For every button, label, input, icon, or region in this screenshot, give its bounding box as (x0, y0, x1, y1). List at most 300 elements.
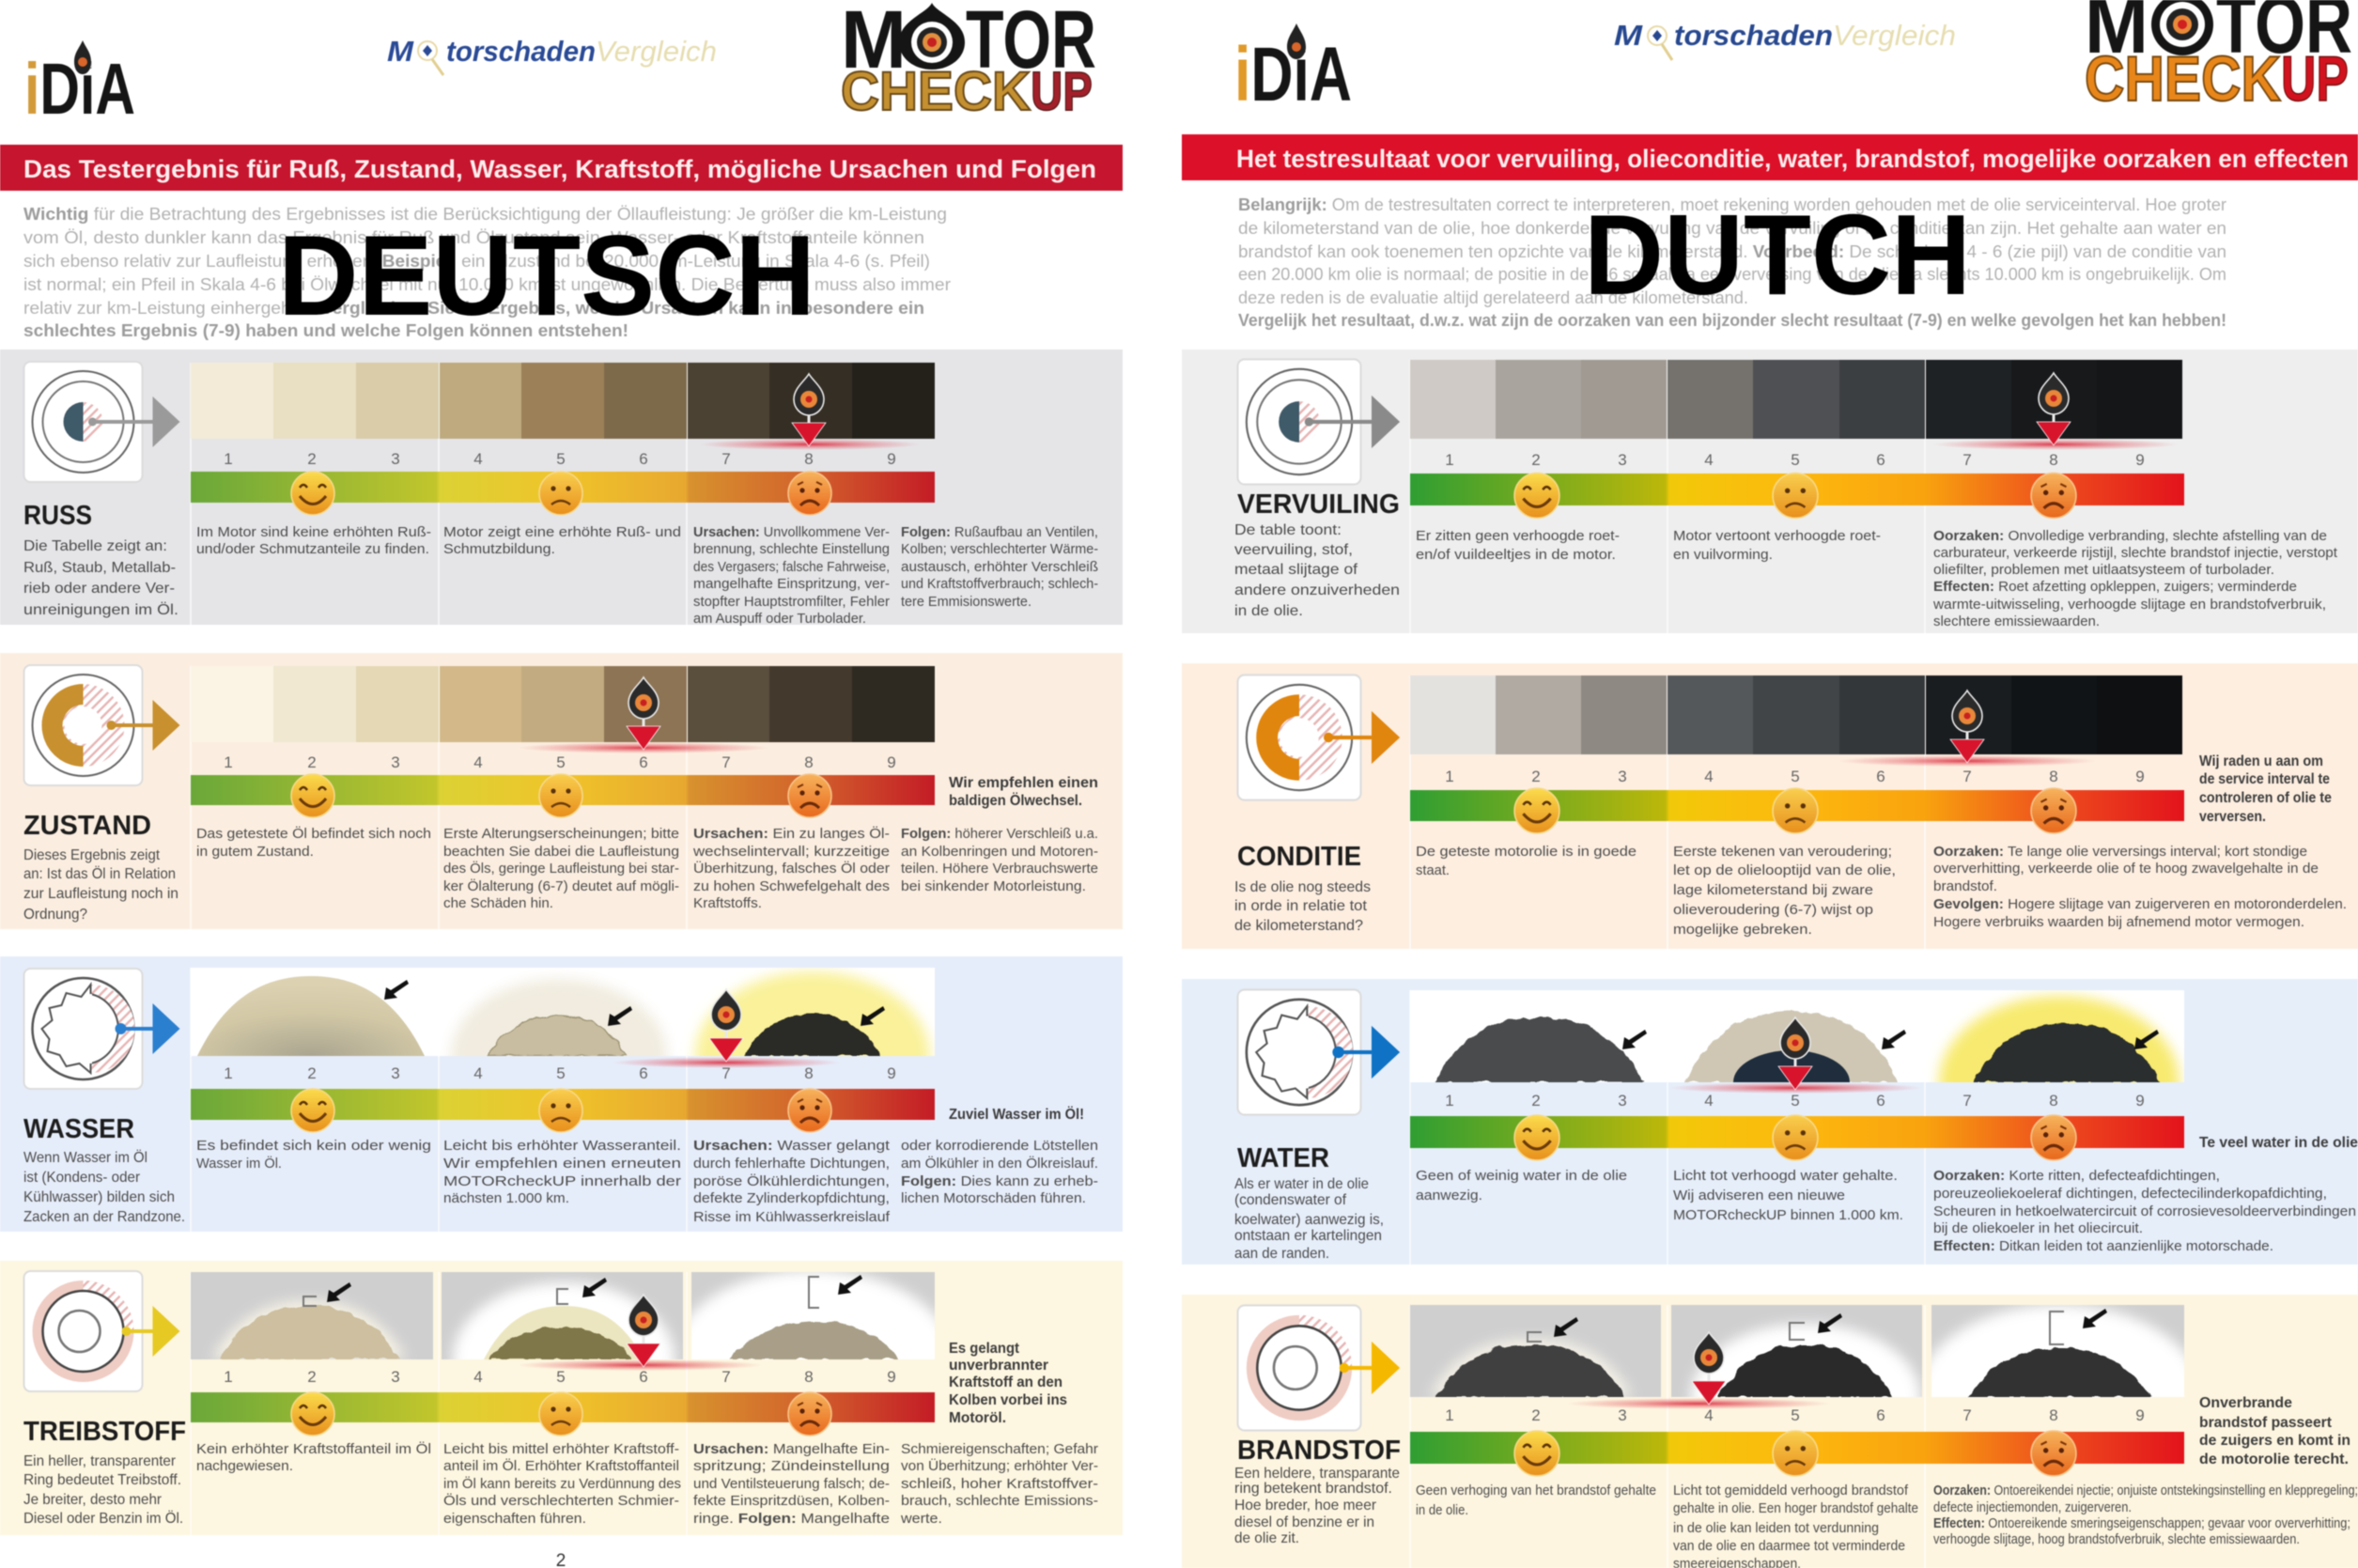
description: Je breiter, desto mehr (23, 1492, 163, 1508)
logo: MotorschadenVergleich: torschaden (446, 35, 596, 68)
explanatory note: de zuigers en komt in (2199, 1433, 2350, 1449)
logo: MOTOR CHECKUP: CHECK (2085, 43, 2281, 115)
text columns: Ursachen: Wasser gelangt (693, 1138, 891, 1154)
text columns: Ursachen: Unvollkommene Ver- (693, 524, 890, 540)
recommendation note: Wij raden u aan om (2199, 753, 2323, 769)
logo: MotorschadenVergleich (1614, 19, 1956, 60)
scale numbers: 2 (1531, 1406, 1541, 1424)
heading: VERVUILING (1237, 489, 1400, 520)
description: ring betekent brandstof. (1234, 1481, 1392, 1497)
scale numbers: 1 (224, 1368, 233, 1386)
scale numbers (1445, 451, 2145, 469)
description: Ein heller, transparenter (23, 1453, 177, 1469)
logo: MotorschadenVergleich (387, 35, 717, 75)
description: Diesel oder Benzin im Öl. (23, 1510, 183, 1527)
description: (condenswater of (1234, 1192, 1347, 1208)
text columns: Scheuren in hetkoelwatercircuit of corrosievesoldeerverbindingen (1933, 1203, 2356, 1219)
intro text: een 20.000 km olie is normaal; de positie in de 4-6 schaal na een verversing van de olie na slechts 10.000 km is ongebruikelijk. Om (1238, 265, 2226, 284)
text columns: Folgen: höherer Verschleiß u.a. (901, 826, 1098, 842)
condition colour scale (191, 666, 935, 742)
text columns: Erste Alterungserscheinungen; bitte (443, 826, 679, 842)
intro text: vom Öl, desto dunkler kann das Ergebnis für Ruß und Ölzustand sein. Wasser- oder Kraftstoffanteile können (23, 228, 924, 247)
text columns: nachgewiesen. (196, 1458, 293, 1474)
icon: water spot (1237, 989, 1400, 1115)
panel: TREIBSTOFF (0, 1261, 1123, 1535)
text columns: oververhitting, verkeerde olie of te hoog zwavelgehalte in de (1933, 861, 2319, 877)
text columns: Wir empfehlen einen erneuten (443, 1156, 681, 1172)
description: diesel of benzine er in (1234, 1514, 1374, 1530)
scale numbers: 6 (639, 1368, 648, 1386)
description (23, 538, 178, 618)
scale numbers: 1 (1445, 1406, 1454, 1424)
text columns: Es befindet sich kein oder wenig (196, 1138, 431, 1154)
title banner (1182, 134, 2358, 180)
description (1234, 879, 1371, 934)
scale numbers: 4 (473, 1064, 483, 1082)
scale numbers (1445, 1406, 2145, 1424)
text columns: Effecten: Roet afzetting opkleppen, zuigers; verminderde (1933, 579, 2297, 595)
text columns: Motor zeigt eine erhöhte Ruß- und (443, 524, 681, 540)
scale numbers: 5 (556, 1368, 566, 1386)
scale numbers: 3 (391, 1368, 400, 1386)
result marker 7 (612, 989, 841, 1068)
text columns: oder korrodierende Lötstellen (901, 1138, 1098, 1154)
text columns: durch fehlerhafte Dichtungen, (693, 1156, 890, 1172)
description: Wenn Wasser im Öl (23, 1149, 147, 1166)
text columns: Überhitzung, falsches Öl oder (693, 860, 890, 877)
text columns: Folgen: Rußaufbau an Ventilen, (901, 524, 1098, 540)
scale numbers: 7 (721, 450, 731, 468)
text columns: brennung, schlechte Einstellung (693, 541, 890, 557)
intro text: schlechtes Ergebnis (7-9) haben und welche Folgen können entstehen! (23, 321, 628, 340)
explanatory note: Kraftstoff an den (949, 1374, 1063, 1390)
text columns: brauch, schlechte Emissions- (901, 1493, 1098, 1509)
text columns: ker Ölalterung (6-7) deutet auf mögli- (443, 877, 679, 894)
language label: DEUTSCH: DEUTSCH (278, 211, 815, 339)
description: Dieses Ergebnis zeigt (23, 847, 161, 863)
explanatory note (2199, 1395, 2350, 1467)
description: De table toont: (1234, 522, 1342, 538)
scale numbers: 5 (1791, 451, 1800, 469)
scale numbers: 2 (307, 753, 317, 771)
logo: MOTOR CHECKUP: UP (1031, 61, 1093, 122)
recommendation note (2199, 753, 2332, 825)
recommendation note: controleren of olie te (2199, 790, 2332, 806)
description: metaal slijtage of (1234, 562, 1358, 578)
text columns: austausch, erhöhter Verschleiß (901, 559, 1098, 575)
scale numbers: 8 (804, 753, 814, 771)
result marker 8 (1932, 373, 2179, 450)
text columns: MOTORcheckUP innerhalb der (443, 1173, 681, 1189)
description: in de olie. (1234, 603, 1303, 619)
recommendation note: verversen. (2199, 809, 2266, 825)
text columns: en/of vuildeeltjes in de motor. (1416, 547, 1616, 563)
panel: WATER (1182, 979, 2358, 1265)
rating bar with faces (191, 1392, 935, 1436)
text columns (1416, 1483, 2358, 1568)
scale numbers: 7 (721, 753, 731, 771)
scale numbers: 2 (1531, 1092, 1541, 1110)
intro text: brandstof kan ook toenemen ten opzichte van de kilometerstand. Voorbeeld: De schaal van 4 - 6 (zie pijl) van de conditie van (1238, 242, 2226, 261)
description: andere onzuiverheden (1234, 582, 1400, 598)
logo: MotorschadenVergleich: M (387, 35, 414, 68)
intro text: de kilometerstand van de olie, hoe donkerder de vervuiling van de vervuiling of de conditie kan zijn. Het gehalte aan water en (1238, 219, 2226, 238)
text columns: eigenschaften führen. (443, 1511, 586, 1527)
title banner: Das Testergebnis für Ruß, Zustand, Wasser, Kraftstoff, mögliche Ursachen und Folgen (23, 155, 1096, 183)
text columns: mangelhafte Einspritzung, ver- (693, 576, 890, 592)
text columns: schleiß, hoher Kraftstoffver- (901, 1476, 1098, 1492)
text columns: Geen of weinig water in de olie (1416, 1168, 1627, 1184)
water spot images (1411, 990, 2185, 1083)
text columns: werte. (900, 1511, 942, 1527)
description: aan de randen. (1234, 1246, 1329, 1262)
heading: WASSER (23, 1114, 134, 1144)
text columns (196, 825, 1098, 911)
rating bar with faces (191, 1089, 935, 1132)
warning note: Zuviel Wasser im Öl! (949, 1107, 1084, 1123)
text columns: in de olie kan leiden tot verdunning (1673, 1520, 1879, 1536)
scale numbers: 9 (887, 1064, 896, 1082)
description: Zacken an der Randzone. (23, 1209, 185, 1225)
description (23, 847, 178, 923)
text columns: und Kraftstoffverbrauch; schlech- (901, 576, 1098, 592)
rating bar with faces (1410, 788, 2184, 833)
explanatory note: de motorolie terecht. (2199, 1452, 2349, 1467)
text columns: stopfter Hauptstromfilter, Fehler (693, 594, 890, 610)
scale numbers: 7 (721, 1368, 731, 1386)
text columns: che Schäden hin. (443, 895, 553, 911)
soot colour scale (191, 363, 935, 439)
logo: MotorschadenVergleich: M (1614, 19, 1643, 52)
text columns: lage kilometerstand bij zware (1673, 882, 1873, 898)
scale numbers: 7 (721, 1064, 731, 1082)
recommendation note: de service interval te (2199, 771, 2330, 787)
intro text (1238, 195, 2226, 330)
text columns: Ursachen: Ein zu langes Öl- (693, 825, 890, 842)
result marker 6 (518, 677, 769, 753)
description (1234, 522, 1400, 619)
text columns: in gutem Zustand. (196, 844, 314, 860)
text columns: Er zitten geen verhoogde roet- (1416, 528, 1620, 544)
text columns: beachten Sie dabei die Laufleistung (443, 844, 679, 860)
title banner: Het testresultaat voor vervuiling, olieconditie, water, brandstof, mogelijke oorzaken en effecten (1236, 145, 2349, 173)
scale numbers: 6 (1876, 451, 1885, 469)
result marker 7 (1838, 691, 2096, 767)
text columns: Motor vertoont verhoogde roet- (1673, 528, 1881, 544)
logo: iDiA: iDiA (24, 49, 135, 130)
scale numbers: 6 (639, 450, 648, 468)
text columns: Licht tot verhoogd water gehalte. (1673, 1168, 1898, 1184)
text columns: carburateur, verkeerde rijstijl, slechte brandstof injectie, verstopt (1933, 545, 2338, 561)
text columns: und/oder Schmutzanteile zu finden. (196, 541, 429, 557)
scale numbers (1445, 768, 2145, 785)
panel: WASSER (0, 956, 1123, 1232)
explanatory note: unverbrannter (949, 1358, 1048, 1374)
text columns: Kraftstoffs. (693, 895, 762, 911)
description: Is de olie nog steeds (1234, 879, 1371, 895)
explanatory note (949, 1341, 1067, 1426)
intro text: Wichtig für die Betrachtung des Ergebnisses ist die Berücksichtigung der Öllaufleistung: Je größer die km-Leistung (23, 205, 947, 224)
description: an: Ist das Öl in Relation (23, 865, 176, 882)
icon: fuel spot (24, 1271, 180, 1391)
text columns (1416, 844, 2347, 938)
description: veervuiling, stof, (1234, 542, 1353, 558)
scale numbers: 1 (224, 450, 233, 468)
text columns: Folgen: Dies kann zu erheb- (901, 1173, 1098, 1189)
logo: MotorschadenVergleich: torschaden (1674, 19, 1833, 52)
scale numbers: 4 (473, 450, 483, 468)
scale numbers: 4 (1704, 768, 1714, 785)
description (23, 1149, 185, 1225)
text columns: defecte injectiemonden, zuigerveren. (1933, 1499, 2132, 1515)
scale numbers: 3 (391, 1064, 400, 1082)
description (1234, 1176, 1384, 1262)
text columns: zu hohen Schwefelgehalt des (693, 878, 890, 894)
icon: fuel spot (1237, 1305, 1400, 1431)
description: Ruß, Staub, Metallab- (23, 560, 176, 576)
scale numbers (224, 753, 896, 771)
text columns: teilen. Höhere Verbrauchswerte (901, 861, 1098, 877)
page: Dutch (1182, 0, 2358, 1568)
scale numbers: 6 (639, 1064, 648, 1082)
text columns: olieveroudering (6-7) wijst op (1673, 902, 1873, 918)
scale numbers: 1 (1445, 451, 1454, 469)
description: in orde in relatie tot (1234, 898, 1368, 914)
scale numbers: 1 (1445, 1092, 1454, 1110)
text columns: brandstof. (1933, 878, 1997, 894)
scale numbers: 7 (1962, 1092, 1972, 1110)
text columns: anteil im Öl. Erhöhter Kraftstoffanteil (443, 1457, 679, 1474)
logo: MotorschadenVergleich: Vergleich (596, 35, 717, 68)
scale numbers: 2 (1531, 451, 1541, 469)
intro text: relativ zur km-Leistung einhergehen. Vergleichen Sie Ihr Ergebnis, welche Ursachen kann insbesondere ein (23, 299, 924, 318)
scale numbers: 8 (804, 1064, 814, 1082)
text columns: des Öls, geringe Laufleistung bei star- (443, 860, 679, 877)
text columns: am Ölkühler in den Ölkreislauf. (901, 1155, 1098, 1172)
scale numbers: 9 (2135, 1406, 2145, 1424)
text columns: verhoogde slijtage, hoog brandstofverbruik, slechte emissiewaarden. (1933, 1531, 2300, 1547)
rating bar with faces (191, 774, 935, 817)
explanatory note: Onverbrande (2199, 1395, 2292, 1411)
explanatory note: Es gelangt (949, 1341, 1019, 1357)
text columns (196, 1138, 1098, 1225)
recommendation note: baldigen Ölwechsel. (949, 793, 1082, 809)
text columns: lichen Motorschäden führen. (901, 1190, 1086, 1206)
scale numbers: 9 (2135, 451, 2145, 469)
panel: BRANDSTOF (1182, 1295, 2358, 1568)
scale numbers: 3 (1618, 451, 1627, 469)
text columns: Gevolgen: Hogere slijtage van zuigerveren en motoronderdelen. (1933, 896, 2347, 912)
text columns: an Kolbenringen und Motoren- (901, 844, 1098, 860)
heading: TREIBSTOFF (23, 1417, 186, 1447)
heading: WATER (1237, 1143, 1329, 1173)
soot colour scale (1410, 360, 2182, 439)
text columns: tere Emmisionswerte. (901, 594, 1032, 610)
text columns: Oorzaken: Te lange olie verversings interval; kort stondige (1933, 844, 2307, 860)
text columns: bij de oliekoeler in het oliecircuit. (1933, 1220, 2143, 1236)
scale numbers: 6 (1876, 1406, 1885, 1424)
panel: RUSS (0, 349, 1123, 627)
scale numbers: 8 (2049, 1092, 2058, 1110)
text columns: Das getestete Öl befindet sich noch (196, 825, 431, 842)
rating bar with faces (1410, 474, 2184, 518)
text columns: let op de olielooptijd van de olie, (1673, 862, 1896, 878)
description: ontstaan er kartelingen (1234, 1228, 1382, 1244)
heading: CONDITIE (1237, 842, 1361, 872)
scale numbers: 7 (1962, 1406, 1972, 1424)
recommendation note: Wir empfehlen einen (949, 775, 1098, 791)
scale numbers: 9 (887, 450, 896, 468)
text columns: am Auspuff oder Turbolader. (693, 611, 866, 627)
scale numbers: 5 (1791, 768, 1800, 785)
warning note: Te veel water in de olie (2199, 1135, 2358, 1151)
description (1234, 1466, 1400, 1546)
description: Die Tabelle zeigt an: (23, 538, 167, 554)
recommendation note (949, 775, 1098, 809)
text columns (196, 1440, 1098, 1527)
text columns: oliefilter, problemen met uitlaatsysteem of turbolader. (1933, 562, 2274, 578)
scale numbers: 5 (1791, 1092, 1800, 1110)
fuel spot images (190, 1272, 936, 1360)
description: Ordnung? (23, 907, 87, 923)
scale numbers: 8 (2049, 768, 2058, 785)
scale numbers: 1 (224, 1064, 233, 1082)
scale numbers: 3 (391, 753, 400, 771)
scale numbers: 4 (473, 753, 483, 771)
description: de kilometerstand? (1234, 918, 1363, 934)
scale numbers: 9 (2135, 768, 2145, 785)
condition colour scale (1410, 675, 2182, 754)
text columns: en vuilvorming. (1673, 547, 1773, 563)
logo: MOTOR CHECKUP (2085, 0, 2352, 115)
text columns: slechtere emissiewaarden. (1933, 613, 2100, 629)
text columns (1416, 1168, 2356, 1254)
logo: MotorschadenVergleich: Vergleich (1833, 19, 1956, 52)
scale numbers (224, 450, 896, 468)
description: Als er water in de olie (1234, 1176, 1369, 1192)
scale numbers: 7 (1962, 768, 1972, 785)
text columns: poreuzeoliekoeleraf dichtingen, defectecilinderkopafdichting, (1933, 1186, 2327, 1202)
description: Hoe breder, hoe meer (1234, 1498, 1377, 1514)
panel: ZUSTAND (0, 653, 1123, 929)
description: de olie zit. (1234, 1530, 1299, 1546)
scale numbers: 6 (1876, 1092, 1885, 1110)
panel: VERVUILING (1182, 349, 2358, 633)
text columns: von Überhitzung; erhöhter Ver- (901, 1457, 1098, 1474)
scale numbers: 2 (1531, 768, 1541, 785)
logo: MOTOR CHECKUP: CHECK (841, 61, 1031, 122)
description: Een heldere, transparante (1234, 1466, 1400, 1482)
text columns: Wasser im Öl. (196, 1155, 282, 1172)
scale numbers: 2 (307, 450, 317, 468)
intro text: deze reden is de evaluatie altijd gerelateerd aan de kilometerstand. (1238, 288, 1748, 307)
scale numbers: 2 (307, 1064, 317, 1082)
scale numbers: 9 (887, 1368, 896, 1386)
text columns: Schmiereigenschaften; Gefahr (901, 1441, 1098, 1457)
explanatory note: Motoröl. (949, 1410, 1006, 1426)
scale numbers: 4 (1704, 1092, 1714, 1110)
result marker 4 (1566, 1332, 1831, 1409)
text columns: Eerste tekenen van veroudering; (1673, 844, 1892, 860)
text columns: Im Motor sind keine erhöhten Ruß- (196, 524, 431, 540)
explanatory note: brandstof passeert (2199, 1415, 2332, 1431)
scale numbers: 4 (473, 1368, 483, 1386)
rating bar with faces (191, 472, 935, 515)
text columns: De geteste motorolie is in goede (1416, 844, 1637, 860)
scale numbers: 9 (887, 753, 896, 771)
result marker 6 (518, 1295, 762, 1371)
text columns: van de olie en daarmee tot verminderde (1673, 1538, 1905, 1554)
text columns: mogelijke gebreken. (1673, 922, 1812, 938)
text columns: bei sinkender Motorleistung. (901, 878, 1086, 894)
icon: condition spot (1237, 675, 1400, 800)
scale numbers (1445, 1092, 2145, 1110)
text columns: Schmutzbildung. (443, 541, 555, 557)
title banner (0, 145, 1123, 191)
scale numbers: 8 (804, 1368, 814, 1386)
text columns: Kein erhöhter Kraftstoffanteil im Öl (196, 1440, 431, 1457)
text columns: aanwezig. (1416, 1188, 1482, 1203)
text columns (196, 524, 1098, 627)
logo: iDiA: iDiA (1234, 32, 1352, 117)
rating bar with faces (1410, 1431, 2184, 1476)
scale numbers: 2 (307, 1368, 317, 1386)
scale numbers: 5 (556, 450, 566, 468)
scale numbers: 8 (804, 450, 814, 468)
description: Kühlwasser) bilden sich (23, 1189, 175, 1205)
text columns: MOTORcheckUP binnen 1.000 km. (1673, 1207, 1903, 1223)
text columns: gehalte in olie. Een hoger brandstof gehalte (1673, 1500, 1918, 1516)
text columns (1416, 528, 2338, 629)
scale numbers: 4 (1704, 1406, 1714, 1424)
text columns: und Ventilsteuerung falsch; de- (693, 1476, 890, 1492)
language label: DUTCH: DUTCH (1584, 191, 1971, 318)
text columns: Licht tot gemiddeld verhoogd brandstof (1673, 1483, 1909, 1498)
text columns: nächsten 1.000 km. (443, 1190, 569, 1206)
scale numbers: 3 (1618, 1092, 1627, 1110)
description: zur Laufleistung noch in (23, 886, 178, 902)
icon: condition spot (24, 665, 180, 785)
water spot images (192, 968, 935, 1057)
scale numbers: 3 (1618, 1406, 1627, 1424)
scale numbers: 5 (1791, 1406, 1800, 1424)
scale numbers: 1 (1445, 768, 1454, 785)
text columns: ringe. Folgen: Mangelhafte (693, 1511, 890, 1527)
scale numbers: 8 (2049, 451, 2058, 469)
heading: BRANDSTOF (1237, 1436, 1401, 1466)
intro text: ist normal; ein Pfeil in Skala 4-6 bei Ölwechsel mit nur 10.000 km ist ungewöhnlich. Die Bewertung muss also immer (23, 275, 951, 294)
scale numbers: 1 (224, 753, 233, 771)
description: Ring bedeutet Treibstoff. (23, 1472, 181, 1488)
scale numbers: 4 (1704, 451, 1714, 469)
icon: soot spot (24, 362, 180, 482)
text columns: poröse Ölkühlerdichtungen, (693, 1172, 890, 1189)
text columns: Effecten: Ditkan leiden tot aanzienlijke motorschade. (1933, 1238, 2273, 1254)
intro text: Vergelijk het resultaat, d.w.z. wat zijn de oorzaken van een bijzonder slecht resultaat (7-9) en welke gevolgen het kan hebben! (1238, 311, 2226, 330)
description: ist (Kondens- oder (23, 1170, 141, 1186)
text columns: staat. (1416, 862, 1450, 878)
scale numbers: 5 (556, 1064, 566, 1082)
text columns: Ursachen: Mangelhafte Ein- (693, 1441, 890, 1457)
scale numbers: 6 (639, 753, 648, 771)
result marker 8 (699, 374, 921, 450)
description (23, 1453, 183, 1527)
icon: soot spot (1237, 359, 1400, 485)
description: unreinigungen im Öl. (23, 601, 178, 618)
scale numbers (224, 1368, 896, 1386)
text columns: Oorzaken: Onvolledige verbranding, slechte afstelling van de (1933, 528, 2327, 544)
panel: CONDITIE (1182, 663, 2358, 949)
